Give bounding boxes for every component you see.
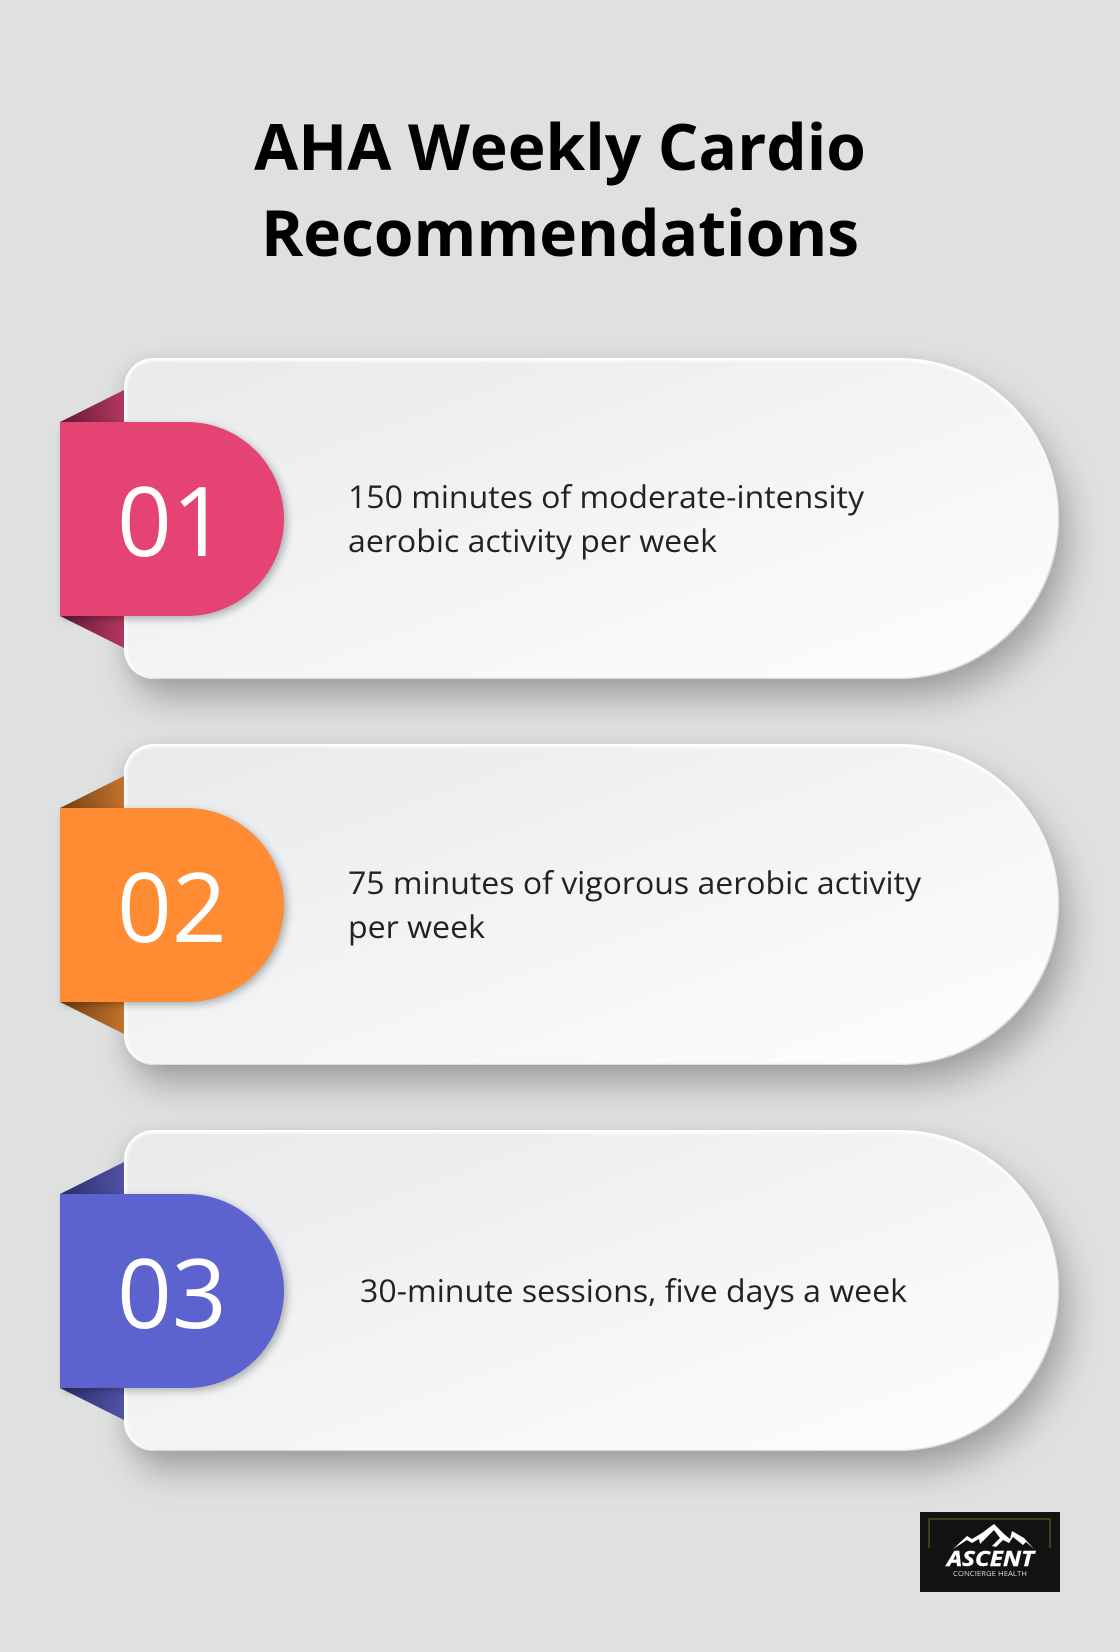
text: step 02: 75 minutes of vigorous aerobic activity [348, 862, 921, 904]
number 01: 01 [117, 454, 227, 585]
text: step 02 [348, 862, 921, 948]
logo: Ascent Concierge Health [920, 1512, 1060, 1592]
text: step 02: per week [348, 906, 486, 948]
number 02: 02 [117, 840, 227, 971]
title [254, 102, 866, 275]
number badge 01 [60, 422, 284, 616]
ribbon folds 03 [60, 1162, 124, 1420]
text: step 01 [348, 476, 864, 562]
number badge 03 [60, 1194, 284, 1388]
card background 03 [124, 1130, 1059, 1451]
ribbon folds 02 [60, 776, 124, 1034]
card background 01 [124, 358, 1059, 679]
card background 02 [124, 744, 1059, 1065]
text: step 03: 30-minute sessions, five days a week [360, 1270, 908, 1312]
panel: step 02 [59, 740, 1086, 1102]
text: step 01: aerobic activity per week [348, 520, 718, 562]
title: Recommendations [261, 188, 859, 275]
logo: Ascent Concierge Health: ASCENT [945, 1545, 1036, 1573]
ribbon folds 01 [60, 390, 124, 648]
text: step 01: 150 minutes of moderate-intensity [348, 476, 864, 518]
panel: step 01 [59, 354, 1086, 716]
number 03: 03 [117, 1226, 227, 1357]
number badge 02 [60, 808, 284, 1002]
title: AHA Weekly Cardio [254, 102, 866, 189]
logo: Ascent Concierge Health: CONCIERGE HEALTH [953, 1569, 1027, 1579]
panel: step 03 [59, 1126, 1086, 1488]
